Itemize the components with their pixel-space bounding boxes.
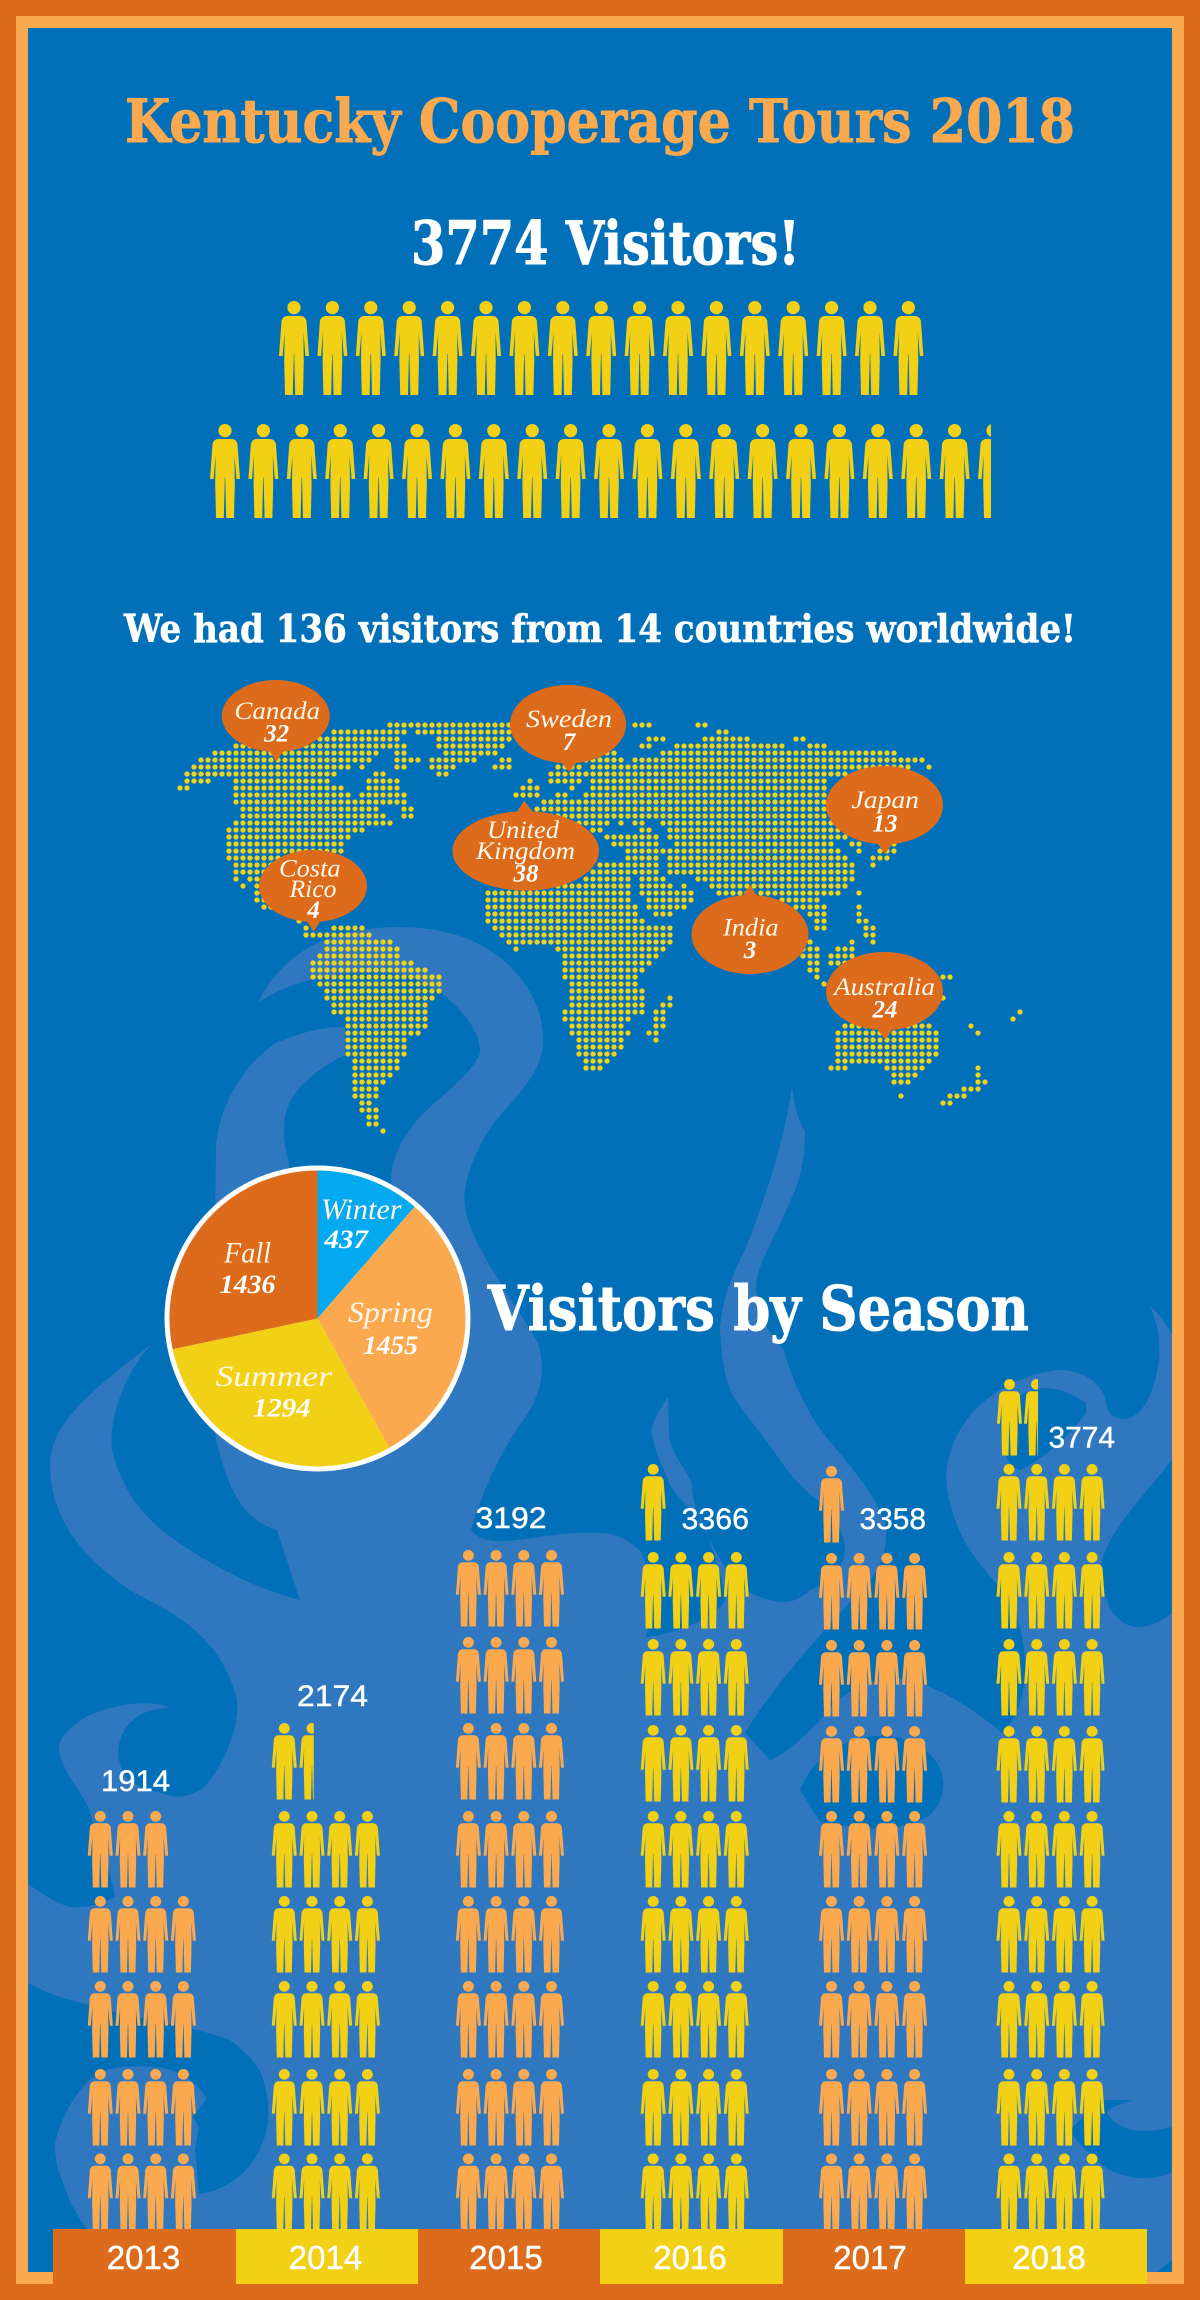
dark pocket: top right hook xyxy=(1000,1388,1086,1470)
callout: Australia: 24 xyxy=(872,997,898,1024)
year bar: 2018 xyxy=(965,2229,1147,2284)
visitors by season heading: Visitors by Season xyxy=(487,1272,1029,1345)
callout: Costa Rica: Costa xyxy=(279,856,341,883)
callout: Costa Rica: Rico xyxy=(288,876,336,903)
pie chart: visitors by season: Spring xyxy=(348,1296,433,1329)
year bar: 2017 xyxy=(783,2229,965,2284)
year bar: 2015 xyxy=(418,2229,600,2284)
column: 2018 xyxy=(996,1379,1105,2230)
column: 2017 xyxy=(819,1466,927,2230)
dark pocket: left wall xyxy=(28,1566,238,1908)
pie chart: visitors by season: Winter xyxy=(321,1193,402,1226)
callout: United Kingdom: Kingdom xyxy=(475,838,575,865)
callout: United Kingdom: United xyxy=(487,817,560,844)
callout: Japan: 13 xyxy=(872,811,898,838)
column value labels: 1914 xyxy=(101,1765,170,1798)
slice: spring xyxy=(318,1207,465,1448)
callout: Australia xyxy=(826,952,943,1040)
people row two xyxy=(210,424,1008,518)
year bar: 2014 xyxy=(236,2229,418,2284)
dark corner: bottom right xyxy=(1157,2260,1172,2272)
slice: fall xyxy=(169,1170,318,1349)
column value labels: 3358 xyxy=(860,1503,926,1536)
callout: Sweden xyxy=(510,685,626,772)
column value labels xyxy=(101,1422,1115,1798)
pie chart: visitors by season: 1436 xyxy=(220,1270,276,1299)
column: 2015 xyxy=(456,1550,564,2230)
callout: India: 3 xyxy=(743,937,756,964)
year bar: 2015: 2015 xyxy=(469,2239,543,2276)
callout: Sweden: 7 xyxy=(563,729,577,756)
pie chart: visitors by season: 1455 xyxy=(363,1331,418,1360)
year bar: 2016: 2016 xyxy=(653,2239,727,2276)
column value labels: 3774 xyxy=(1048,1422,1115,1455)
pie chart: visitors by season: Fall xyxy=(223,1237,271,1270)
callout: Australia: Australia xyxy=(832,974,935,1001)
people row one xyxy=(279,301,923,395)
dark pocket: arc interior xyxy=(800,1736,943,1828)
year bar: 2018: 2018 xyxy=(1012,2239,1086,2276)
column value labels: 3366 xyxy=(682,1503,749,1536)
pie chart: visitors by season: Summer xyxy=(216,1360,332,1393)
dotted world map xyxy=(180,725,1020,1131)
pie chart: visitors by season xyxy=(164,1166,470,1472)
total visitors heading: 3774 Visitors! xyxy=(411,209,800,279)
column value labels: 2174 xyxy=(297,1680,368,1713)
callout: Costa Rica: 4 xyxy=(306,897,320,924)
callout: Canada xyxy=(222,680,330,762)
callout: Japan: Japan xyxy=(852,787,919,814)
background swirl pattern xyxy=(28,927,1172,2272)
countries heading: We had 136 visitors from 14 countries worldwide! xyxy=(123,606,1076,651)
column value labels: 3192 xyxy=(476,1502,546,1535)
slice: summer xyxy=(173,1318,389,1466)
dark pocket: lower right xyxy=(1070,2100,1172,2178)
year bar: 2014: 2014 xyxy=(289,2239,362,2276)
pie chart: visitors by season: 1294 xyxy=(253,1394,311,1423)
year bar: 2013: 2013 xyxy=(107,2239,180,2276)
callout: Canada: 32 xyxy=(263,721,289,748)
year bar: 2016 xyxy=(600,2229,783,2284)
year bar: 2017: 2017 xyxy=(833,2239,907,2276)
callout: Canada: Canada xyxy=(234,698,320,725)
callout: Costa Rica xyxy=(259,850,367,932)
callout: United Kingdom xyxy=(452,801,599,891)
column: 2013 xyxy=(88,1811,196,2230)
column: 2016 xyxy=(641,1464,749,2230)
slice: winter xyxy=(318,1170,415,1318)
callout: Japan xyxy=(826,766,943,854)
title: Kentucky Cooperage Tours 2018 xyxy=(125,87,1075,157)
dark pocket: lower left xyxy=(28,1983,268,2272)
callout: India xyxy=(692,885,808,974)
pie chart: visitors by season: 437 xyxy=(323,1225,369,1254)
callout: India: India xyxy=(722,915,779,942)
callout: United Kingdom: 38 xyxy=(512,861,539,888)
callout: Sweden: Sweden xyxy=(526,706,612,733)
year bar: 2013 xyxy=(53,2229,236,2284)
column: 2014 xyxy=(272,1723,380,2230)
